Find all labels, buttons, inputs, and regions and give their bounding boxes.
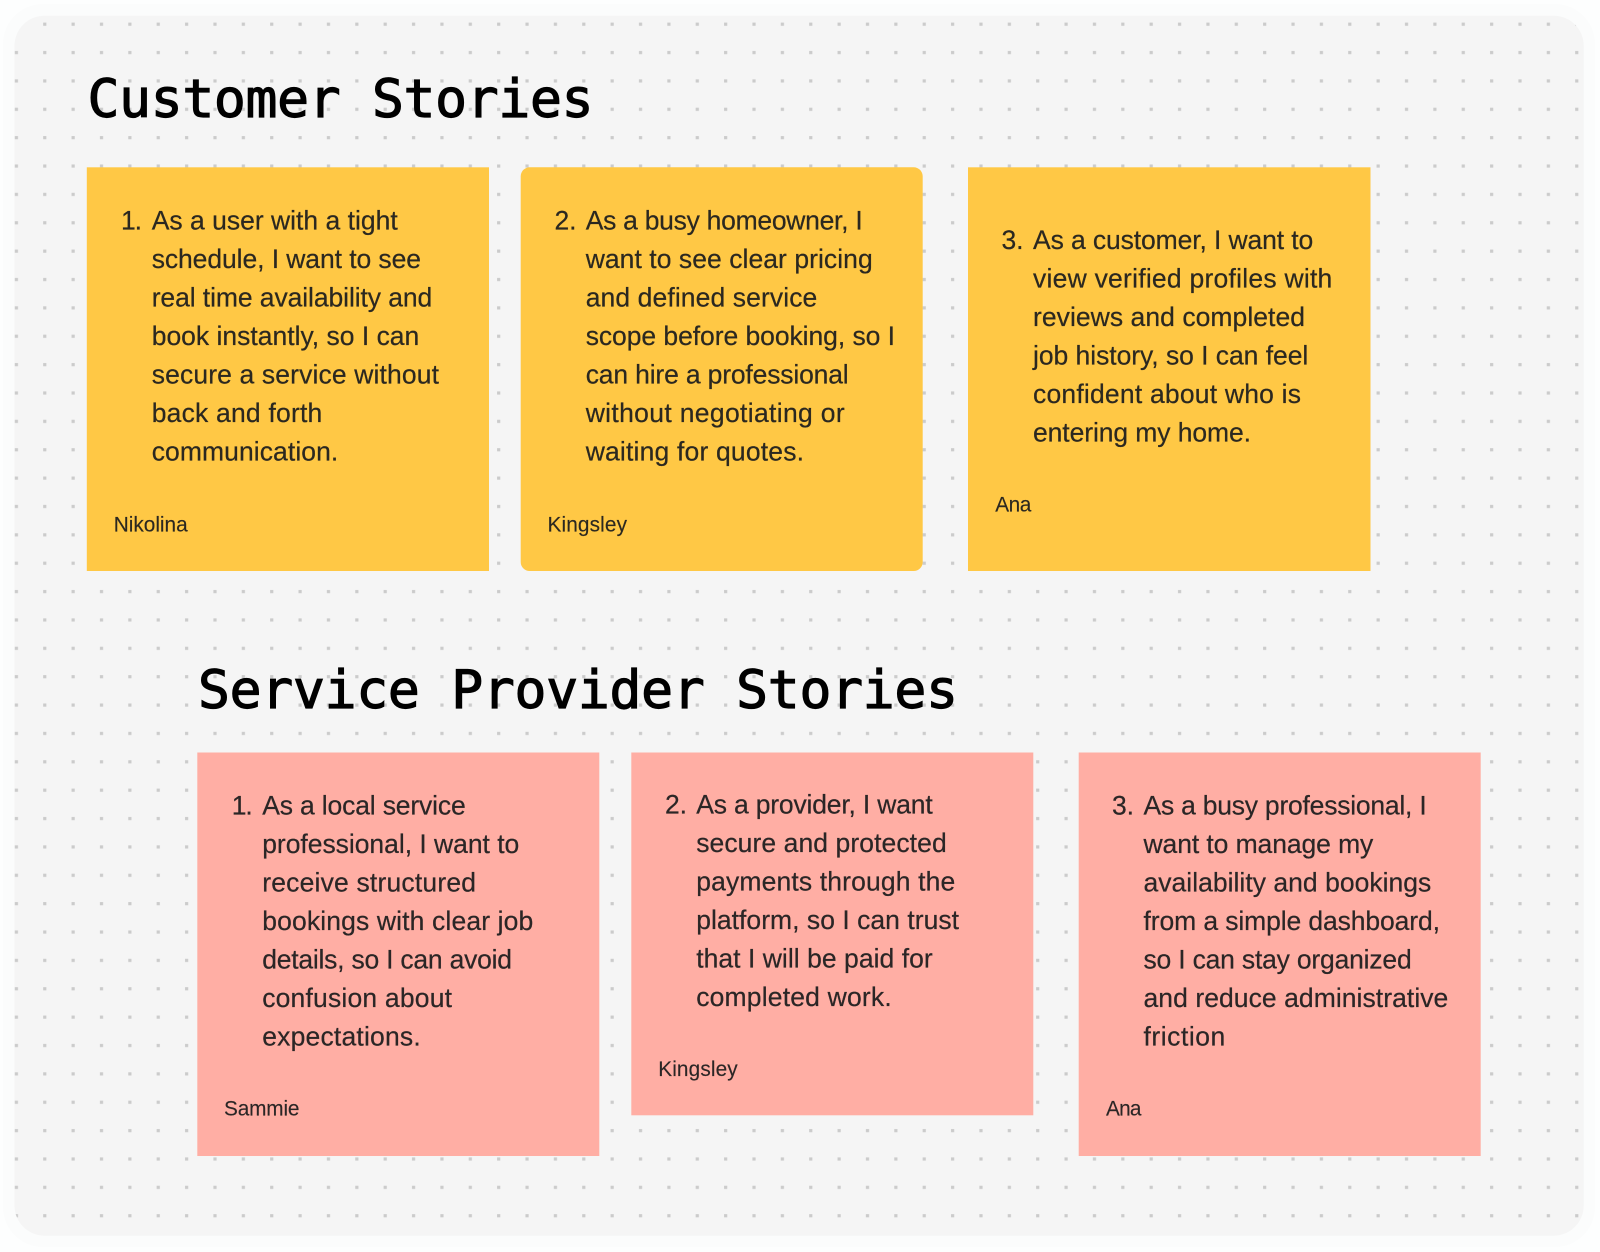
story text: platform, so I can trust: [696, 905, 960, 935]
story text: bookings with clear job: [262, 906, 533, 936]
story text: book instantly, so I can: [152, 321, 419, 351]
card background: [197, 752, 599, 1156]
story text: [696, 790, 960, 1012]
story text: details, so I can avoid: [262, 944, 512, 974]
story text: [152, 206, 440, 467]
story text: from a simple dashboard,: [1144, 906, 1440, 936]
story text: payments through the: [696, 867, 955, 897]
story text: want to see clear pricing: [585, 244, 873, 274]
author: Kingsley: [658, 1058, 738, 1081]
story text: real time availability and: [152, 283, 432, 313]
list number: 3.: [1112, 790, 1134, 820]
card background: [631, 752, 1033, 1115]
story text: back and forth: [152, 398, 322, 428]
story text: [585, 206, 895, 467]
story text: confusion about: [262, 983, 453, 1013]
story text: As a user with a tight: [152, 206, 398, 236]
story text: communication.: [152, 437, 338, 467]
list number: 2.: [554, 206, 576, 236]
author: Sammie: [224, 1098, 300, 1120]
card background: [87, 167, 489, 571]
author: Ana: [995, 494, 1032, 517]
story text: view verified profiles with: [1033, 264, 1332, 294]
story text: without negotiating or: [585, 398, 845, 428]
panel: customer story 1: [87, 167, 489, 571]
heading: Customer Stories: Customer Stories: [88, 69, 594, 130]
panel: provider story 2: [631, 752, 1033, 1115]
panel: provider story 3: [1079, 752, 1481, 1156]
story text: and defined service: [586, 283, 817, 313]
story text: job history, so I can feel: [1032, 340, 1308, 370]
story text: [1032, 225, 1332, 448]
story text: availability and bookings: [1144, 867, 1431, 897]
story text: As a customer, I want to: [1033, 225, 1313, 255]
heading: Service Provider Stories: Service Provider Stories: [198, 660, 958, 721]
list number: 2.: [665, 790, 687, 820]
story text: expectations.: [262, 1021, 421, 1051]
story text: As a busy homeowner, I: [586, 206, 863, 236]
story text: can hire a professional: [586, 360, 849, 390]
story text: completed work.: [696, 982, 892, 1012]
author: Nikolina: [114, 513, 188, 536]
story text: that I will be paid for: [696, 944, 933, 974]
list number: 3.: [1002, 225, 1024, 255]
story text: professional, I want to: [262, 829, 519, 859]
panel: customer story 2: [521, 167, 923, 571]
card background: [521, 167, 923, 571]
story text: As a busy professional, I: [1144, 790, 1427, 820]
story text: friction: [1144, 1021, 1225, 1051]
card background: [1079, 752, 1481, 1156]
card background: [968, 167, 1370, 571]
story text: receive structured: [262, 867, 476, 897]
panel: provider story 1: [197, 752, 599, 1156]
story text: As a local service: [262, 790, 466, 820]
story text: [262, 790, 533, 1051]
story text: want to manage my: [1142, 829, 1374, 859]
story text: confident about who is: [1033, 379, 1301, 409]
story text: schedule, I want to see: [152, 244, 421, 274]
list number: 1.: [232, 790, 253, 820]
story text: so I can stay organized: [1144, 944, 1412, 974]
story text: entering my home.: [1033, 418, 1251, 448]
story text: secure and protected: [696, 828, 947, 858]
list number: 1.: [121, 205, 142, 235]
panel: customer story 3: [968, 167, 1370, 571]
story text: [1142, 790, 1448, 1051]
author: Ana: [1106, 1098, 1142, 1120]
story text: and reduce administrative: [1144, 983, 1448, 1013]
story text: scope before booking, so I: [586, 321, 895, 351]
story text: As a provider, I want: [696, 790, 933, 820]
story text: reviews and completed: [1033, 302, 1305, 332]
author: Kingsley: [548, 513, 628, 536]
story text: waiting for quotes.: [585, 437, 804, 467]
story text: secure a service without: [152, 360, 440, 390]
